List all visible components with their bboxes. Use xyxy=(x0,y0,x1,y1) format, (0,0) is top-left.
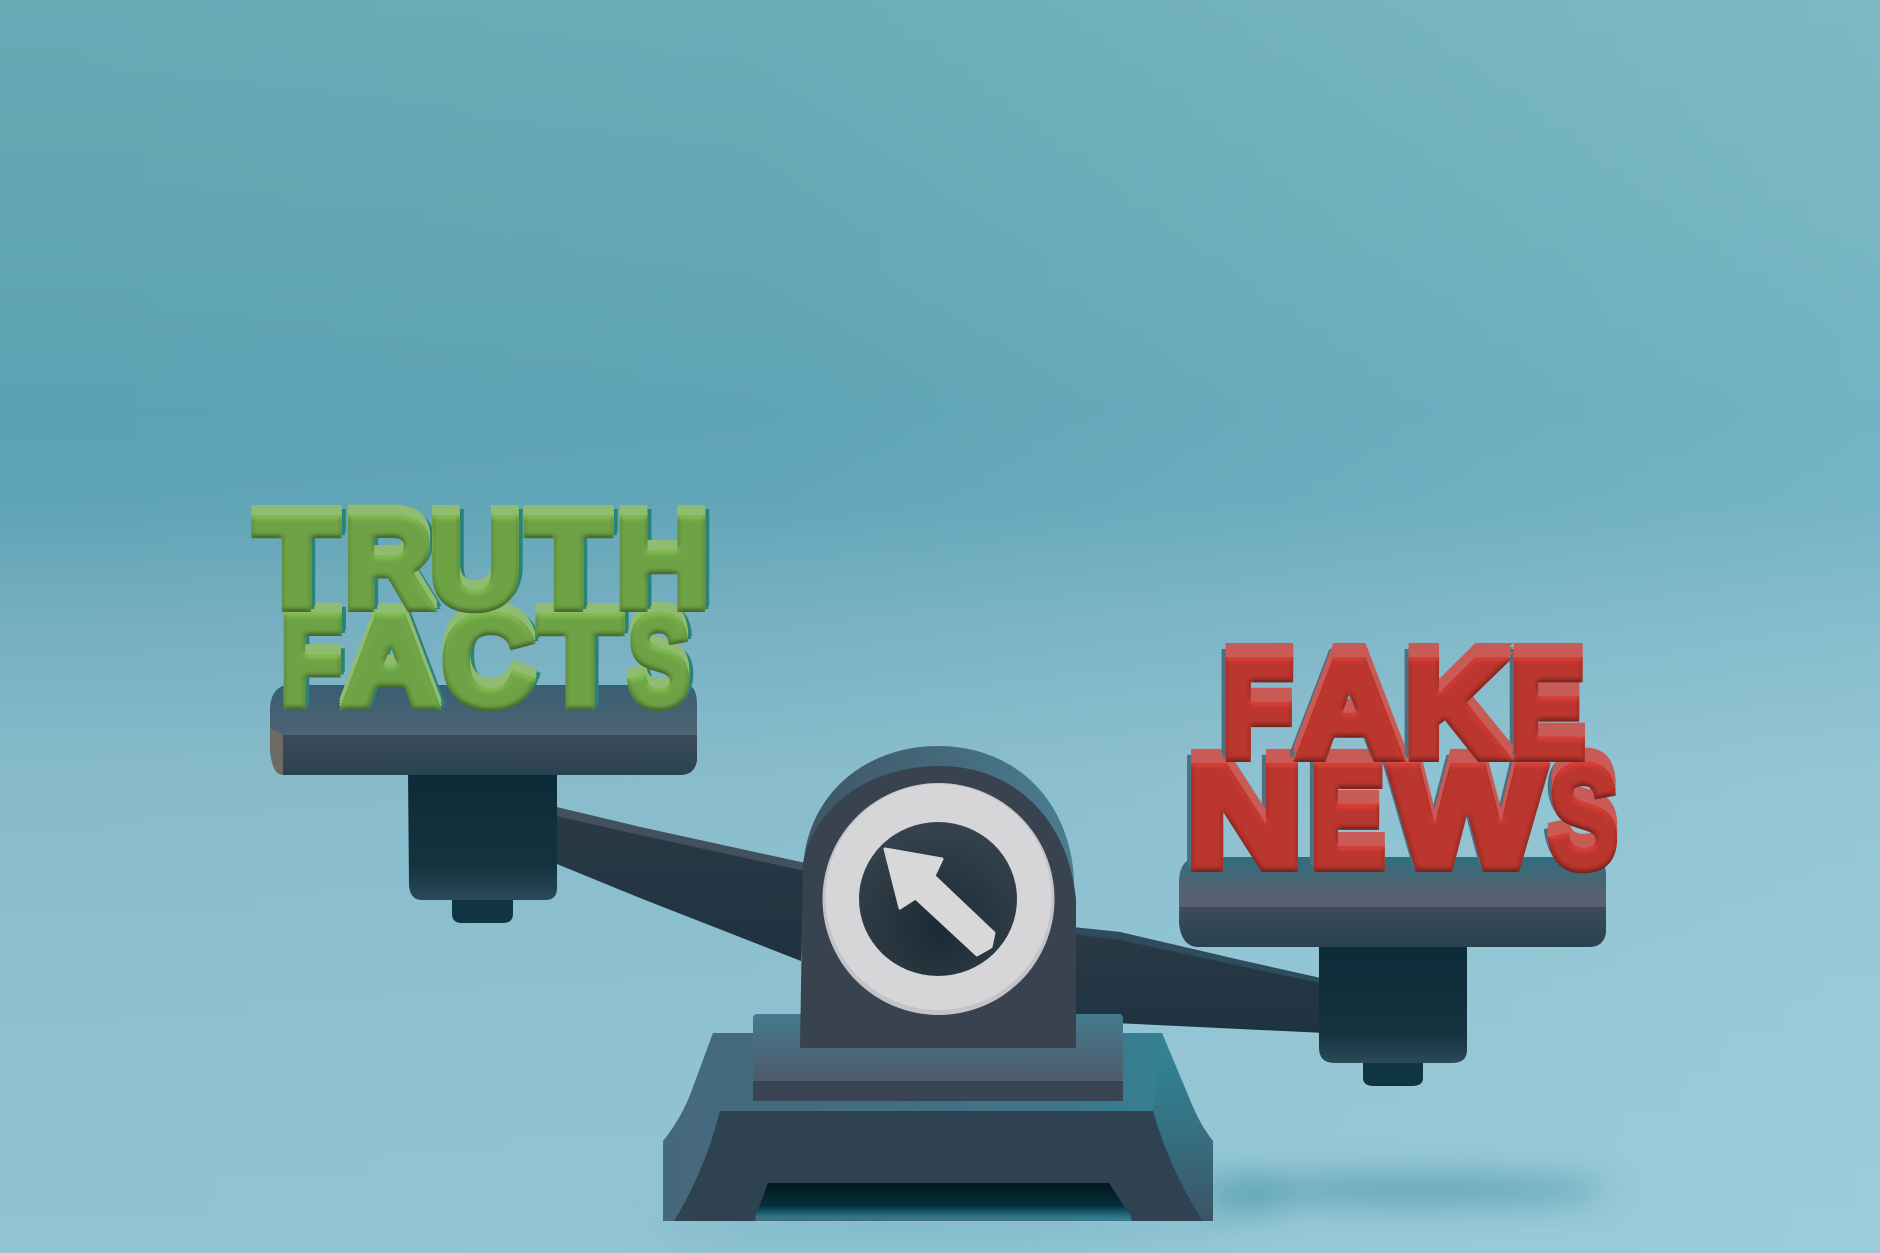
word: TRUTH in green: R xyxy=(344,492,432,636)
word: TRUTH in green: T xyxy=(255,492,338,636)
middle step of the base xyxy=(753,1014,1123,1101)
plate front face xyxy=(283,735,697,775)
word: FAKE in red xyxy=(1222,633,1585,787)
front arch xyxy=(800,766,1076,1048)
base silhouette with sloped sides xyxy=(663,1033,1213,1221)
word: FACTS in green: C xyxy=(442,590,534,734)
left beam arm xyxy=(552,806,805,961)
plate side xyxy=(270,728,283,775)
word: NEWS in red: E xyxy=(1310,737,1385,898)
right support block xyxy=(1319,942,1467,1086)
step top surface xyxy=(753,1014,1123,1081)
ground shadow under the scale xyxy=(650,1175,1610,1236)
step front face xyxy=(753,1081,1123,1101)
word: TRUTH in green: T xyxy=(527,492,610,636)
word: TRUTH in green: U xyxy=(429,492,522,636)
dial ring xyxy=(822,783,1054,1015)
word: FACTS in green: S xyxy=(628,590,690,734)
word: FACTS in green: T xyxy=(539,590,621,734)
base front with legs xyxy=(674,1111,1203,1221)
right sloped face xyxy=(1153,1033,1213,1221)
rear arch xyxy=(803,746,1076,1000)
word: FACTS in green: F xyxy=(280,590,342,734)
left plate xyxy=(270,685,697,775)
right plate xyxy=(1179,857,1606,947)
dial arrow pointing toward truth side xyxy=(885,849,994,955)
base of the scale xyxy=(663,1033,1213,1221)
word: FACTS in green xyxy=(280,590,690,734)
left support block xyxy=(408,770,557,923)
pedestal arch xyxy=(800,746,1076,1048)
word: NEWS in red xyxy=(1186,737,1618,898)
word: FAKE in red: E xyxy=(1510,633,1585,787)
word: FAKE in red: K xyxy=(1404,633,1506,787)
word: FACTS in green: A xyxy=(342,590,438,734)
plate front face xyxy=(1179,907,1606,947)
word: TRUTH in green: H xyxy=(616,492,709,636)
plate body with top surface xyxy=(270,685,697,775)
plate body with top surface xyxy=(1179,857,1606,947)
word: NEWS in red: W xyxy=(1391,737,1544,898)
shadow under base arch xyxy=(755,1183,1132,1218)
word: NEWS in red: N xyxy=(1186,737,1303,898)
word: FAKE in red: A xyxy=(1297,633,1402,787)
word: NEWS in red: S xyxy=(1549,737,1618,898)
right beam arm xyxy=(1072,927,1325,1033)
word: FAKE in red: F xyxy=(1222,633,1293,787)
word: TRUTH in green xyxy=(255,492,709,636)
